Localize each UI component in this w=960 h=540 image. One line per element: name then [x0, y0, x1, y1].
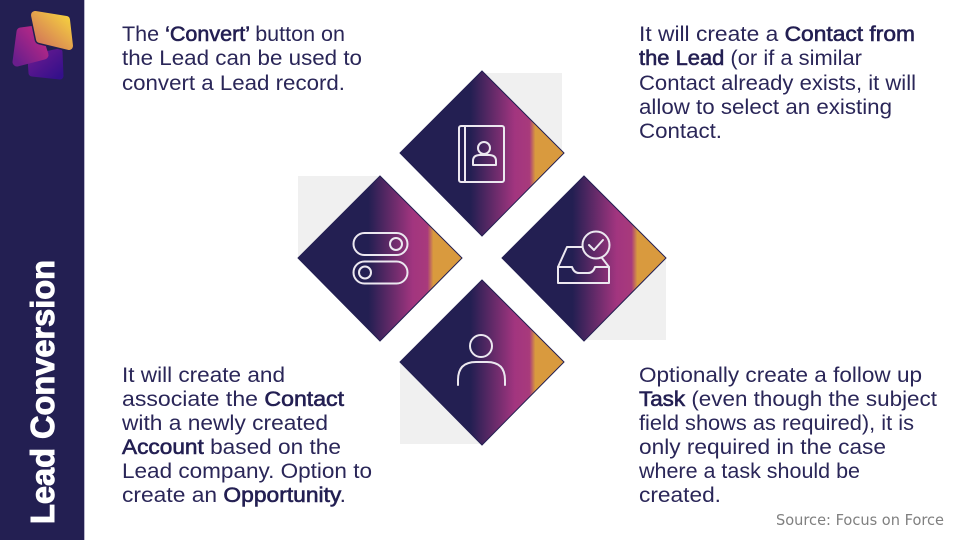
text block: account and opportunity: Lead company. Option to [122, 460, 372, 483]
text block: follow up task: only required in the case [639, 436, 886, 459]
diamond: bottom, person [400, 280, 564, 445]
text block: follow up task: where a task should be [638, 460, 860, 483]
icon: toggles [354, 233, 408, 284]
text block: account and opportunity [121, 364, 372, 507]
grey backing square: top [482, 73, 562, 153]
text block: follow up task [638, 364, 937, 507]
text block: follow up task: Task (even though the subject [639, 388, 937, 411]
icon: person [458, 335, 505, 385]
text block: contact from lead: It will create a Contact from [639, 23, 915, 46]
diamond: right, inbox with check [502, 176, 666, 341]
text block: follow up task: field shows as required), it is [639, 412, 914, 435]
text block: account and opportunity: associate the Contact [122, 388, 344, 411]
grey backing square: left [298, 176, 380, 258]
grey backing square: bottom [400, 362, 482, 444]
grey backing square: right [584, 258, 666, 340]
icon: inbox with check [558, 232, 610, 283]
text block: account and opportunity: Account based on the [122, 436, 341, 459]
text block: follow up task: Optionally create a follow up [639, 364, 922, 387]
text block: account and opportunity: create an Opportunity . [122, 484, 346, 507]
text block: account and opportunity: It will create and [122, 364, 285, 387]
text block: follow up task: created. [639, 484, 721, 507]
text block: convert button [122, 23, 362, 95]
text block: contact from lead: Contact. [639, 120, 722, 143]
text block: contact from lead [639, 23, 916, 143]
sidebar [0, 0, 85, 540]
logo [17, 15, 69, 76]
icon: contact book [459, 126, 504, 182]
text block: convert button: the Lead can be used to [122, 47, 362, 70]
diamond: top, contact book [400, 71, 564, 236]
text block: contact from lead: the Lead (or if a similar [639, 47, 862, 70]
text block: contact from lead: allow to select an existing [639, 96, 892, 119]
text block: convert button: convert a Lead record. [122, 72, 345, 95]
title: Lead Conversion: Lead Conversion [24, 260, 61, 524]
text block: contact from lead: Contact already exists, it will [639, 72, 916, 95]
text block: convert button: The ‘Convert’ button on [122, 23, 345, 46]
source note: Source: Focus on Force [776, 511, 944, 529]
diamond: left, toggles [298, 176, 462, 341]
text block: account and opportunity: with a newly created [121, 412, 328, 435]
